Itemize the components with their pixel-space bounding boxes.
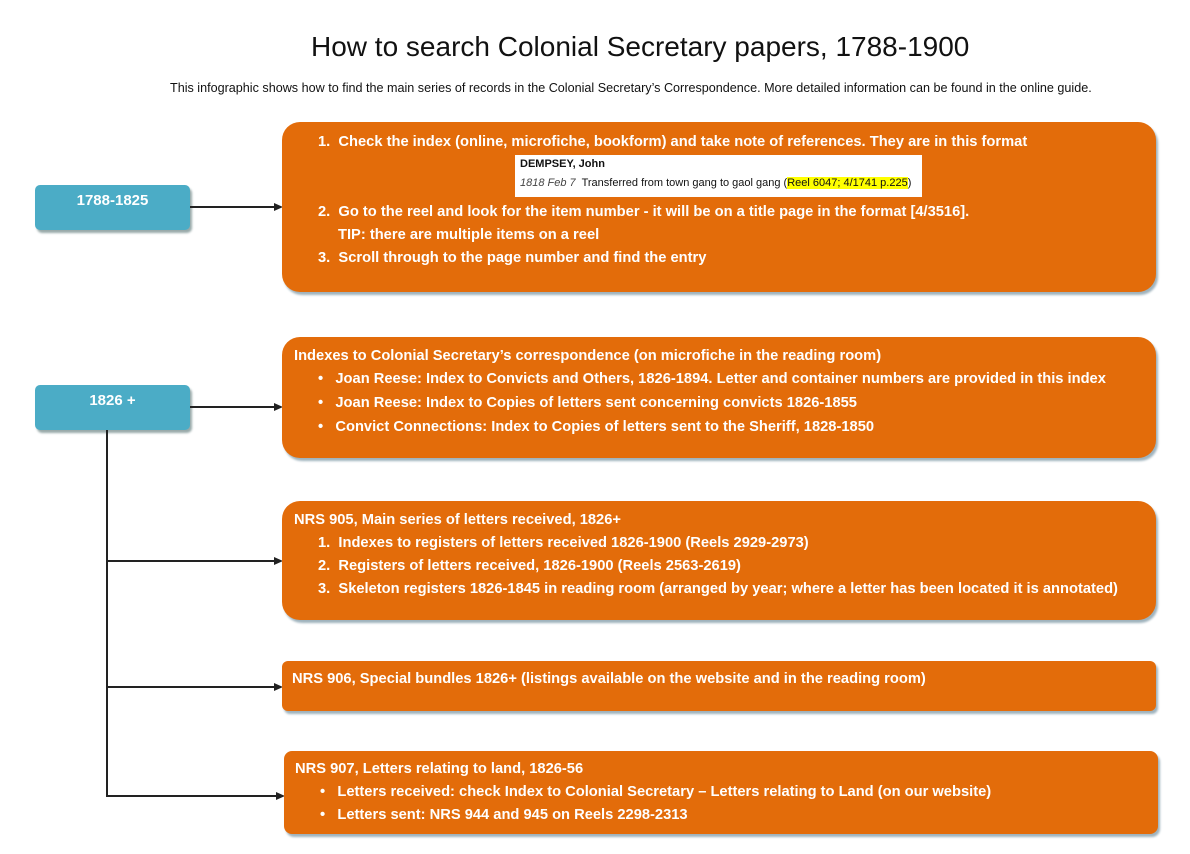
panel: 1788-1825 steps: 1. Check the index (online, microfiche, bookform) and take note of references. They are in this format xyxy=(318,134,1027,150)
panel: 1788-1825 steps: 3. Scroll through to the page number and find the entry xyxy=(318,250,706,266)
panel: NRS 906 xyxy=(282,661,1156,711)
panel: indexes xyxy=(282,337,1156,458)
panel: NRS 907: • Letters received: check Index to Colonial Secretary – Letters relating to Land (on our website) xyxy=(320,784,991,800)
panel: indexes: • Convict Connections: Index to Copies of letters sent to the Sheriff, 1828-1850 xyxy=(318,419,874,435)
panel: indexes: • Joan Reese: Index to Copies of letters sent concerning convicts 1826-1855 xyxy=(318,395,857,411)
label: 1788-1825 xyxy=(35,185,190,230)
panel: NRS 905: 2. Registers of letters received, 1826-1900 (Reels 2563-2619) xyxy=(318,558,741,574)
panel: NRS 905: 1. Indexes to registers of letters received 1826-1900 (Reels 2929-2973) xyxy=(318,535,809,551)
label: 1826 +: 1826 + xyxy=(89,392,136,409)
panel: NRS 905 xyxy=(282,501,1156,620)
panel: indexes: • Joan Reese: Index to Convicts and Others, 1826-1894. Letter and container numbers are provided in this index xyxy=(318,371,1106,387)
panel: NRS 907: NRS 907, Letters relating to land, 1826-56 xyxy=(295,761,583,777)
panel: indexes: Indexes to Colonial Secretary’s correspondence (on microfiche in the reading room) xyxy=(294,348,881,364)
label: 1826 + xyxy=(35,385,190,430)
panel: 1788-1825 steps: TIP: there are multiple items on a reel xyxy=(338,227,599,243)
panel: NRS 906: NRS 906, Special bundles 1826+ (listings available on the website and in the reading room) xyxy=(292,671,926,687)
panel: NRS 907: • Letters sent: NRS 944 and 945 on Reels 2298-2313 xyxy=(320,807,688,823)
example index entry xyxy=(515,155,922,197)
panel: 1788-1825 steps xyxy=(282,122,1156,292)
panel: 1788-1825 steps: 2. Go to the reel and look for the item number - it will be on a title page in the format [4/3516]. xyxy=(318,204,969,220)
example index entry: 1818 Feb 7 Transferred from town gang to gaol gang (Reel 6047; 4/1741 p.225) xyxy=(520,177,911,189)
label: 1788-1825: 1788-1825 xyxy=(77,192,148,209)
example index entry: DEMPSEY, John xyxy=(520,158,605,170)
panel: NRS 907 xyxy=(284,751,1158,834)
subtitle: This infographic shows how to find the main series of records in the Colonial Secretary’s Correspondence. More detailed information can be found in the online guide. xyxy=(170,81,1092,95)
panel: NRS 905: NRS 905, Main series of letters received, 1826+ xyxy=(294,512,621,528)
panel: NRS 905: 3. Skeleton registers 1826-1845 in reading room (arranged by year; where a letter has been located it is annotated) xyxy=(318,581,1118,597)
title: How to search Colonial Secretary papers, 1788-1900 xyxy=(311,31,969,62)
